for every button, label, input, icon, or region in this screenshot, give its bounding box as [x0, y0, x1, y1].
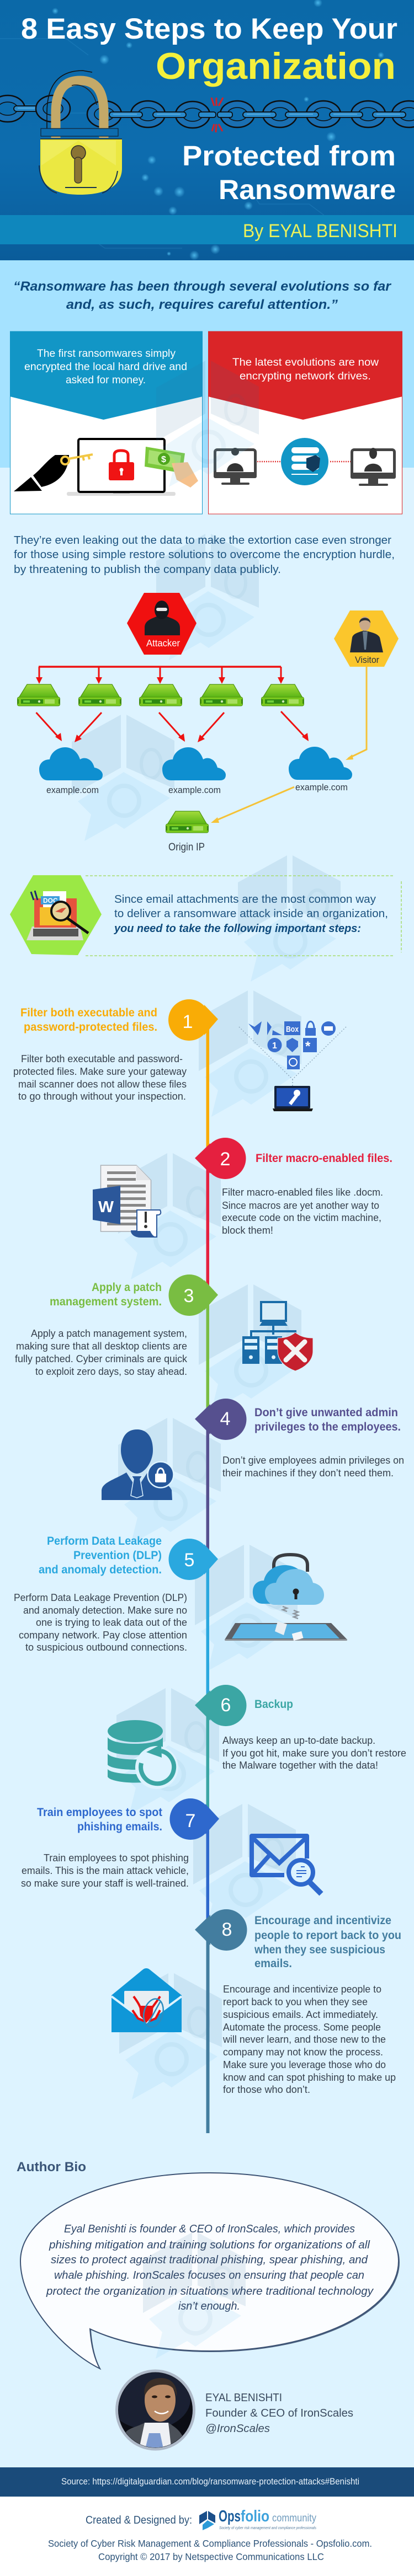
callout: email attachments	[10, 875, 401, 956]
text block: protected files. Make sure your gateway	[13, 1065, 187, 1077]
text block: making sure that all desktop clients are	[16, 1340, 187, 1352]
text block: report back to you when they see	[223, 1996, 368, 2007]
icon: password managers and laptop: Box	[286, 1025, 299, 1034]
title: Organization	[156, 45, 396, 87]
text: author credit: Founder & CEO of IronScales	[205, 2407, 353, 2419]
text block	[21, 1852, 189, 1889]
icon: email inspection	[252, 1836, 321, 1894]
text block	[222, 1186, 383, 1236]
icon: attachment inspection: DOC	[43, 897, 58, 904]
heading	[50, 1281, 162, 1308]
byline text: By EYAL BENISHTI	[243, 221, 397, 242]
text: email attachments: Since email attachments are the most common way	[114, 893, 376, 906]
text: author bio: protect the organization in situations where traditional technology	[46, 2285, 374, 2297]
marker 8: 8	[222, 1919, 232, 1940]
icon: servers	[17, 684, 304, 706]
icon: locked user	[102, 1429, 173, 1500]
text: data leaking paragraph	[14, 534, 395, 576]
arrows: attacker to servers	[36, 667, 284, 684]
marker 5: 5	[184, 1550, 194, 1571]
text block: emails. This is the main attack vehicle,	[22, 1865, 189, 1876]
heading: when they see suspicious	[254, 1943, 385, 1956]
labels: example.com: example.com	[168, 785, 221, 795]
panel: latest evolutions	[208, 331, 402, 514]
icon: clouds	[39, 747, 352, 780]
label: origin IP: Origin IP	[168, 842, 205, 853]
heading	[20, 1006, 157, 1033]
illustration: laptop with lock, key and money	[14, 439, 198, 496]
step 4	[102, 1399, 404, 1500]
illustration: laptop with lock, key and money: $	[161, 455, 166, 464]
text block: Since macros are yet another way to	[222, 1199, 379, 1211]
text block: Encourage and incentivize people to	[223, 1983, 381, 1995]
text: data leaking paragraph: by threatening to publish the company data publicly.	[14, 564, 281, 576]
heading: Encourage and incentivize	[254, 1914, 391, 1927]
dashed frame	[86, 876, 401, 956]
icon: Opsfolio logo	[199, 2508, 316, 2530]
heading: Backup	[254, 1697, 293, 1711]
heading: Train employees to spot	[37, 1806, 162, 1819]
heading: management system.	[50, 1295, 162, 1308]
heading: password-protected files.	[24, 1020, 157, 1033]
heading: Filter macro-enabled files.	[256, 1152, 392, 1165]
icon: attacker: Attacker	[146, 638, 180, 649]
text block: mail scanner does not allow these files	[18, 1078, 187, 1090]
title: Protected from	[182, 140, 396, 172]
text block: Perform Data Leakage Prevention (DLP)	[14, 1592, 187, 1603]
watermark in bubble	[143, 2232, 246, 2359]
heading: privileges to the employees.	[254, 1420, 401, 1433]
text block: and anomaly detection. Make sure no	[23, 1604, 187, 1616]
marker 6: 6	[221, 1695, 231, 1716]
credits	[48, 2508, 372, 2562]
heading	[39, 1534, 162, 1576]
copyright: Copyright © 2017 by Netspective Communications LLC	[98, 2551, 324, 2562]
marker 7	[170, 1798, 219, 1840]
text: first ransomwares: The first ransomwares simply	[37, 348, 176, 360]
text block	[222, 1454, 404, 1479]
text block: block them!	[222, 1224, 273, 1236]
text: author bio	[46, 2223, 374, 2312]
arrows: visitor path	[211, 667, 367, 823]
icon: password managers and laptop: *	[305, 1039, 311, 1054]
text block: know and can spot phishing to make up	[223, 2071, 396, 2083]
text block: fully patched. Cyber criminals are quick	[15, 1353, 188, 1364]
text block: Filter both executable and password-	[21, 1053, 183, 1064]
icon: database backup	[108, 1720, 178, 1789]
heading	[254, 1914, 401, 1970]
step 2	[93, 1138, 392, 1237]
text block: the Malware together with the data!	[222, 1759, 378, 1771]
watermark: logo pattern	[72, 361, 341, 2100]
marker 1: 1	[183, 1011, 193, 1032]
text block: to exploit zero days, so stay ahead.	[35, 1365, 187, 1377]
step 7	[21, 1798, 321, 1894]
marker 3: 3	[184, 1286, 194, 1306]
text block: Always keep an up-to-date backup.	[222, 1734, 375, 1746]
icon: cloud lock and tablet	[225, 1555, 347, 1641]
icon: visitor: Visitor	[355, 655, 379, 665]
step 1	[13, 999, 346, 1111]
icon: Opsfolio logo: community	[272, 2513, 316, 2524]
heading: Perform Data Leakage	[47, 1534, 162, 1547]
band: byline	[0, 215, 414, 244]
text block: their machines if they don’t need them.	[222, 1467, 394, 1479]
text: first ransomwares	[24, 348, 187, 386]
marker 7: 7	[185, 1811, 195, 1831]
text: author bio: whale phishing. IronScales focuses on ensuring that people can	[54, 2269, 364, 2282]
icon: password managers and laptop: 1	[272, 1041, 277, 1051]
text block: to suspicious outbound connections.	[25, 1641, 187, 1653]
chart: attack diagram	[17, 593, 399, 853]
icon: password managers and laptop	[239, 1021, 346, 1111]
heading: Don’t give unwanted admin	[254, 1406, 398, 1419]
text block: Don’t give employees admin privileges on	[222, 1454, 404, 1466]
text: email attachments: to deliver a ransomware attack inside an organization,	[114, 908, 388, 920]
quote: and, as such, requires careful attention.”	[66, 297, 338, 312]
icon: macro document: W	[98, 1198, 114, 1216]
illustration: networked monitors and server	[214, 438, 396, 486]
text block: execute code on the victim machine,	[222, 1212, 381, 1223]
text block	[15, 1327, 188, 1377]
icon: origin server	[166, 811, 209, 833]
text block: Apply a patch management system,	[31, 1327, 187, 1339]
panel: header banner	[0, 0, 414, 260]
panel: author speech bubble	[20, 2173, 400, 2370]
text: author credit	[205, 2392, 353, 2435]
text block: so make sure your staff is well-trained.	[21, 1877, 189, 1889]
panel: source band	[0, 2467, 414, 2497]
marker 2	[195, 1138, 246, 1179]
quote: “Ransomware has been through several evolutions so far	[13, 279, 392, 294]
text block	[13, 1053, 187, 1102]
heading: Filter both executable and	[20, 1006, 157, 1019]
heading: phishing emails.	[77, 1820, 162, 1833]
arrows: servers to clouds	[36, 711, 309, 742]
step 5	[14, 1534, 347, 1653]
heading: author bio: Author Bio	[17, 2160, 86, 2175]
copyright	[48, 2538, 372, 2562]
text: data leaking paragraph: for those using simple restore solutions to overcome the encryption hurdle,	[14, 549, 395, 561]
step 3	[15, 1274, 313, 1377]
text: author bio: isn’t enough.	[178, 2300, 240, 2312]
heading: emails.	[254, 1957, 292, 1970]
title	[21, 13, 397, 205]
quote	[13, 279, 392, 312]
marker 3	[169, 1274, 218, 1316]
icon: macro document	[93, 1165, 161, 1237]
text: latest evolutions: The latest evolutions are now	[232, 356, 379, 368]
marker 4	[195, 1399, 246, 1440]
heading: Prevention (DLP)	[73, 1549, 162, 1562]
text block: Train employees to spot phishing	[44, 1852, 189, 1863]
marker 5	[169, 1539, 218, 1580]
icon: Opsfolio logo: Society of cyber risk management and compliance professionals	[219, 2525, 316, 2530]
marker 1	[168, 999, 218, 1041]
icon: Opsfolio logo: Ops	[219, 2508, 241, 2525]
text block: company may not know the process.	[223, 2046, 383, 2058]
step 6	[108, 1685, 406, 1789]
text: first ransomwares: encrypted the local hard drive and	[24, 361, 187, 373]
text block: Filter macro-enabled files like .docm.	[222, 1186, 383, 1198]
text block: Make sure you leverage those who do	[223, 2059, 386, 2070]
title: 8 Easy Steps to Keep Your	[21, 13, 397, 45]
text: latest evolutions: encrypting network drives.	[240, 370, 371, 382]
author photo	[108, 2369, 194, 2451]
text: author bio: sizes to protect against traditional phishing, spear phishing, and	[51, 2254, 368, 2266]
heading	[37, 1806, 162, 1833]
title: Ransomware	[219, 174, 396, 205]
icon: patched network	[242, 1302, 313, 1371]
text: author bio: Eyal Benishti is founder & CEO of IronScales, which provides	[64, 2223, 355, 2235]
panel: first ransomwares	[10, 331, 203, 514]
text block	[14, 1592, 187, 1653]
icon: padlock	[39, 71, 122, 195]
icon: attachment inspection	[10, 875, 102, 955]
labels: example.com: example.com	[46, 785, 99, 795]
text: email attachments	[114, 893, 388, 935]
icon: broken chain	[0, 95, 414, 132]
timeline line	[206, 1020, 210, 2133]
source text: Source: https://digitalguardian.com/blog/ransomware-protection-attacks#Benishti	[61, 2476, 359, 2487]
text: latest evolutions	[232, 356, 379, 382]
text block: will never learn, and those new to the	[222, 2033, 386, 2045]
icon: attacker	[127, 593, 197, 655]
heading: people to report back to you	[254, 1929, 401, 1942]
text: email attachments: you need to take the following important steps:	[114, 923, 361, 935]
text block: If you got hit, make sure you don’t restore	[222, 1747, 406, 1759]
marker 6	[195, 1685, 246, 1726]
step 8	[112, 1909, 401, 2095]
heading: Apply a patch	[92, 1281, 162, 1294]
icon: phishing envelope	[112, 1968, 182, 2032]
text: author credit: @IronScales	[205, 2423, 270, 2435]
labels: example.com	[46, 782, 348, 795]
heading: and anomaly detection.	[39, 1563, 162, 1576]
marker 4: 4	[220, 1409, 230, 1429]
created by: Created & Designed by:	[86, 2514, 192, 2526]
text block: suspicious emails. Act immediately.	[223, 2009, 378, 2020]
icon: Opsfolio logo: folio	[241, 2508, 269, 2525]
text block	[222, 1983, 396, 2095]
text: author bio: phishing mitigation and training solutions for organizations of all	[49, 2239, 370, 2251]
copyright: Society of Cyber Risk Management & Compliance Professionals - Opsfolio.com.	[48, 2538, 372, 2549]
heading	[254, 1406, 401, 1433]
text block: one is trying to leak data out of the	[36, 1616, 187, 1628]
text block: Automate the process. Some people	[223, 2021, 381, 2033]
text: data leaking paragraph: They’re even leaking out the data to make the extortion case even stronger	[14, 534, 391, 547]
text block: for those who don’t.	[223, 2084, 310, 2095]
marker 2: 2	[220, 1149, 230, 1170]
icon: visitor	[334, 610, 399, 667]
text: first ransomwares: asked for money.	[66, 374, 146, 386]
labels: example.com: example.com	[295, 782, 348, 792]
text block: company network. Pay close attention	[19, 1629, 187, 1641]
text: author credit: EYAL BENISHTI	[205, 2392, 282, 2404]
text block	[222, 1734, 406, 1771]
text block: to go through without your inspection.	[18, 1090, 186, 1102]
marker 8	[195, 1909, 247, 1951]
